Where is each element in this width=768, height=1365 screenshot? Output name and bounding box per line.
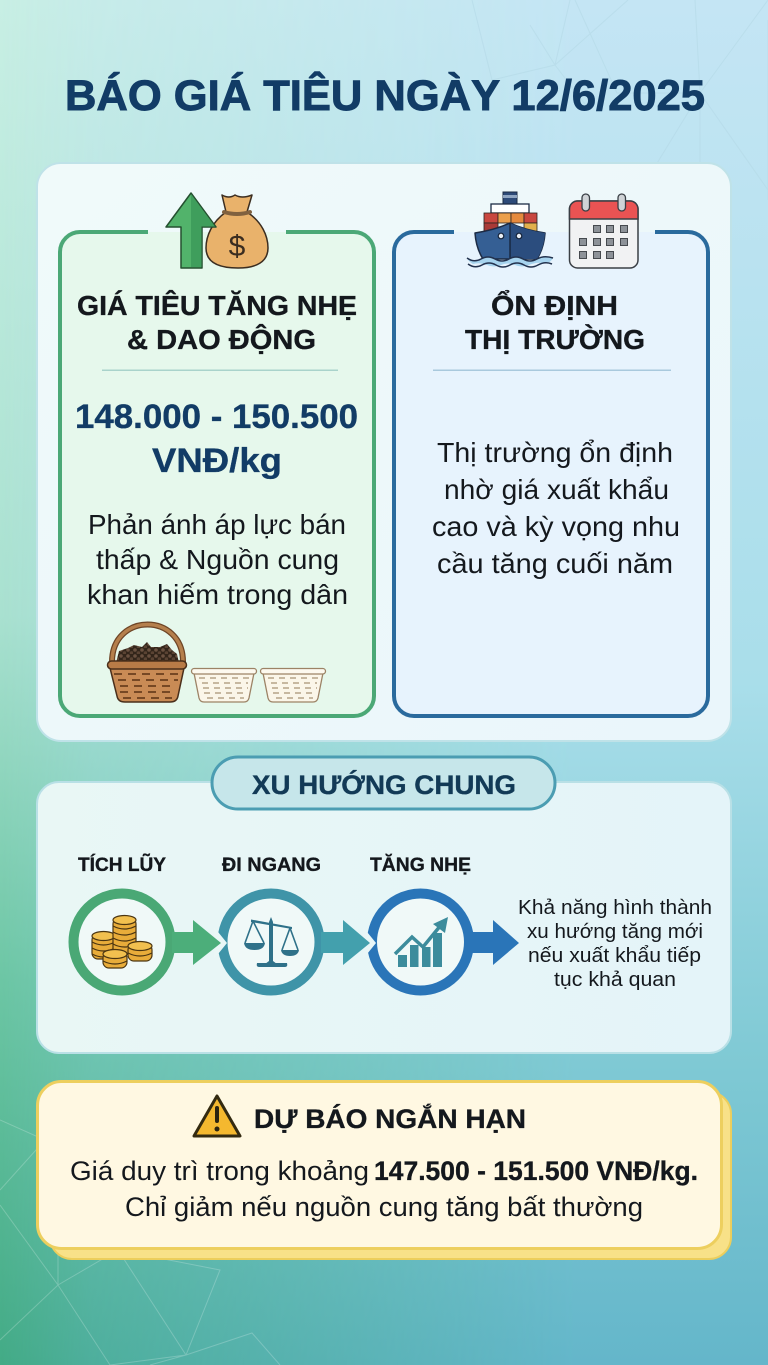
text: market explanation — [432, 437, 680, 579]
heading: price rises slightly — [77, 290, 357, 355]
text: forecast detail — [70, 1156, 698, 1222]
icon: calendar — [570, 194, 638, 268]
heading pill: general trend — [212, 757, 555, 809]
price range — [75, 398, 358, 480]
text: trend outlook: nếu xuất khẩu tiếp — [528, 945, 701, 967]
step labels — [78, 854, 471, 876]
text: trend outlook: tục khả quan — [554, 969, 676, 991]
text: trend outlook: Khả năng hình thành — [518, 897, 712, 919]
text: trend outlook — [518, 897, 712, 991]
panel: market stability card — [394, 192, 708, 716]
text: forecast detail: Chỉ giảm nếu nguồn cung tăng bất thường — [125, 1192, 643, 1222]
heading: market stability: THỊ TRƯỜNG — [465, 324, 645, 355]
text: trend outlook: xu hướng tăng mới — [527, 921, 703, 943]
step labels: TÍCH LŨY — [78, 854, 166, 876]
panel: short-term forecast — [38, 1082, 731, 1259]
icon: up arrow and money bag: $ — [229, 230, 246, 263]
panel: general trend — [37, 757, 731, 1053]
arrow: step 3 to outlook — [471, 920, 519, 965]
icon: container ship — [467, 192, 553, 267]
text: price explanation — [87, 509, 348, 610]
panel: market overview — [37, 163, 731, 741]
icon: full basket and empty baskets — [108, 624, 326, 702]
text: market explanation: Thị trường ổn định — [437, 437, 673, 468]
arrow: step 1 to step 2 — [172, 920, 221, 965]
text: price explanation: thấp & Nguồn cung — [96, 544, 339, 575]
icon: warning triangle — [194, 1096, 240, 1136]
step 3: slight rise ring with chart — [363, 894, 469, 990]
text: price explanation: Phản ánh áp lực bán — [88, 509, 346, 540]
text: forecast detail: Giá duy trì trong khoảng — [70, 1156, 369, 1186]
panel: price card — [60, 193, 374, 716]
arrow: step 2 to step 3 — [321, 920, 370, 965]
text: market explanation: nhờ giá xuất khẩu — [444, 474, 669, 505]
step labels: ĐI NGANG — [222, 855, 321, 876]
price range: 148.000 - 150.500 — [75, 398, 358, 436]
title: BÁO GIÁ TIÊU NGÀY 12/6/2025 — [65, 71, 705, 120]
text: market explanation: cầu tăng cuối năm — [437, 548, 673, 579]
heading: short-term forecast: DỰ BÁO NGẮN HẠN — [254, 1103, 526, 1134]
heading: market stability — [465, 290, 645, 355]
heading: market stability: ỔN ĐỊNH — [491, 290, 618, 321]
step labels: TĂNG NHẸ — [370, 854, 471, 876]
icon: up arrow and money bag — [166, 193, 268, 268]
text: forecast detail: 147.500 - 151.500 VNĐ/kg. — [374, 1156, 698, 1186]
heading: price rises slightly: GIÁ TIÊU TĂNG NHẸ — [77, 290, 357, 321]
price range: VNĐ/kg — [152, 442, 282, 480]
step 2: sideways ring with scale — [214, 894, 320, 990]
heading pill: general trend: XU HƯỚNG CHUNG — [252, 769, 516, 800]
heading: price rises slightly: & DAO ĐỘNG — [127, 323, 316, 355]
text: price explanation: khan hiếm trong dân — [87, 579, 348, 610]
step 1: accumulation ring with coins — [74, 894, 170, 990]
text: market explanation: cao và kỳ vọng nhu — [432, 511, 680, 542]
